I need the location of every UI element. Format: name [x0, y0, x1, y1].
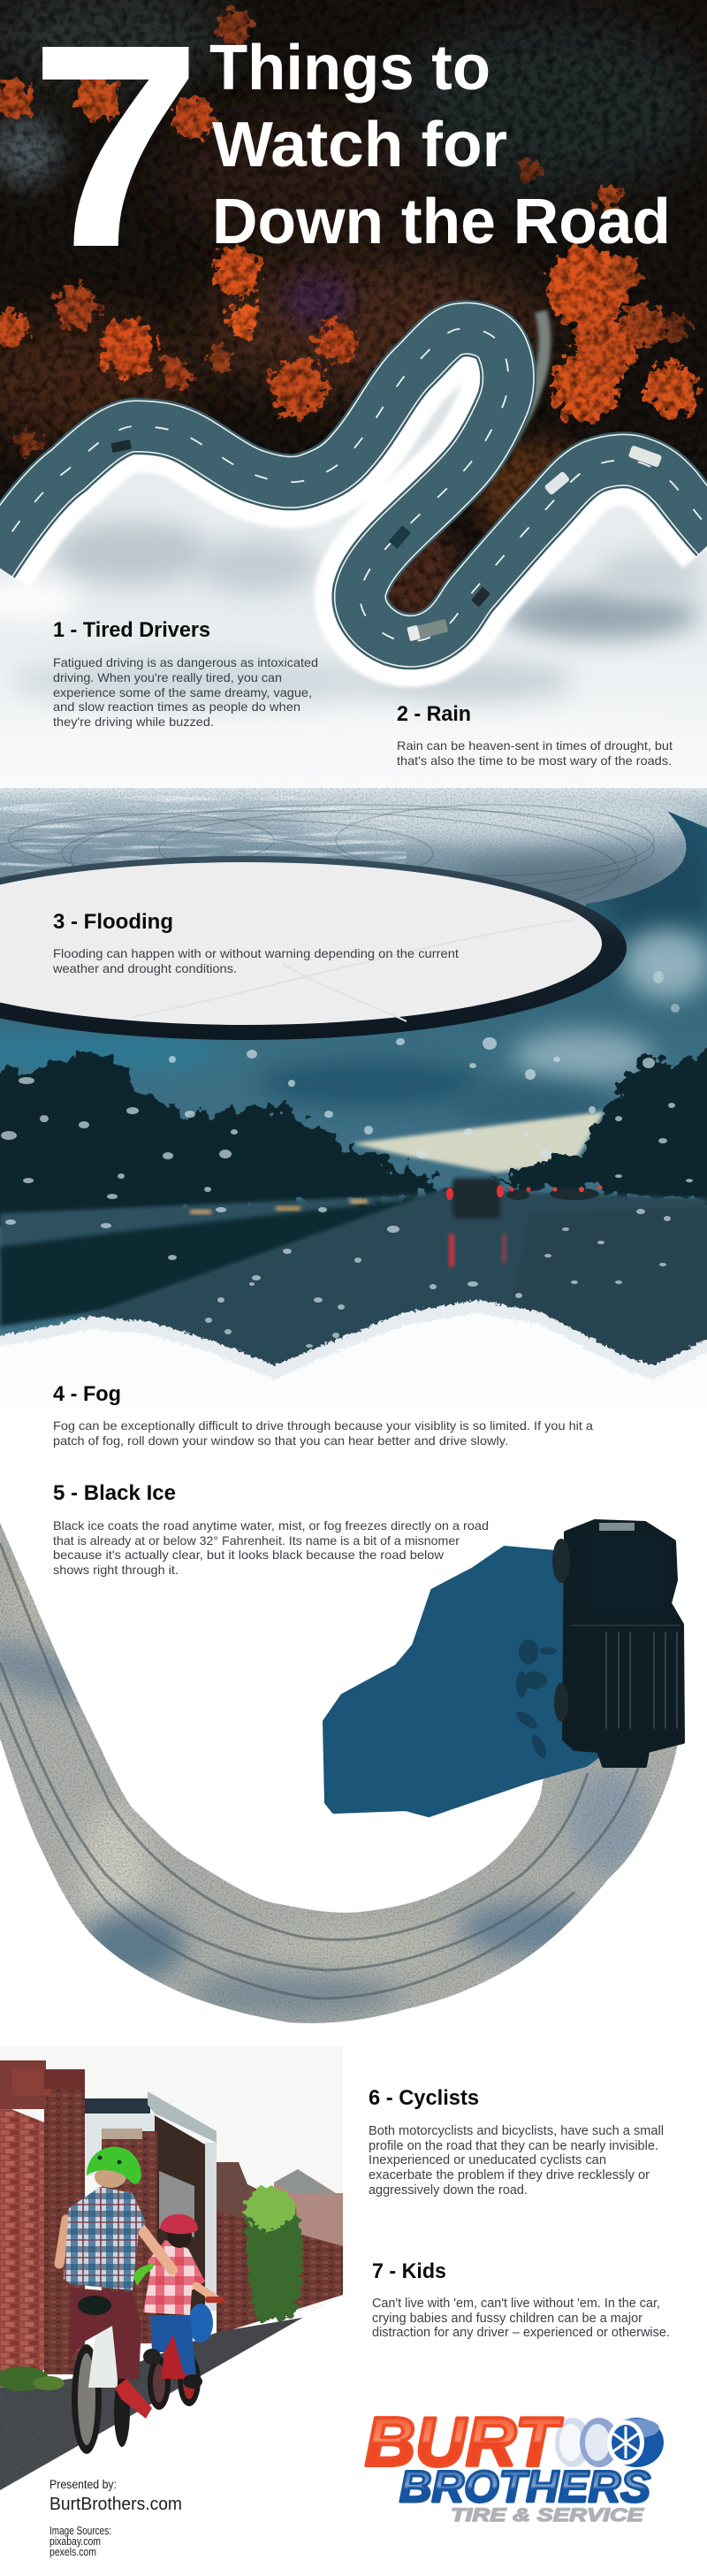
text block: 6 - Cyclists: exacerbate the problem if they drive recklessly or: [369, 2168, 650, 2182]
panel: icy snow-covered road curve: [0, 1517, 707, 2038]
trees: orange foliage clusters: [0, 9, 698, 453]
logo: Burt Brothers Tire and Service: [365, 2403, 664, 2526]
panel: kids cycling photo: [0, 2046, 343, 2503]
text block: 1 - Tired Drivers: they're driving while buzzed.: [53, 715, 214, 729]
text block: presented by and image sources: BurtBrothers.com: [49, 2495, 182, 2514]
text block: presented by and image sources: Presented by:: [49, 2477, 117, 2491]
text block: 3 - Flooding: weather and drought conditions.: [52, 961, 237, 975]
text block: 4 - Fog: patch of fog, roll down your window so that you can hear better and drive slowly.: [53, 1433, 508, 1448]
far brick wall: [217, 2211, 343, 2335]
title: heading text: Watch for: [212, 110, 507, 180]
footprints in the shadow: [513, 1640, 557, 1760]
dark tree lines: [0, 1029, 707, 1229]
text block: 2 - Rain: [397, 702, 673, 768]
text block: 1 - Tired Drivers: experience some of the same dreamy, vague,: [53, 685, 312, 699]
text block: 1 - Tired Drivers: [53, 618, 318, 729]
text block: 7 - Kids: 7 - Kids: [372, 2259, 446, 2283]
road: winding mountain road with white lines: [0, 328, 707, 641]
far houses: [217, 2162, 343, 2246]
text block: 6 - Cyclists: [369, 2086, 664, 2198]
snow edge over the rain photo: [0, 1300, 707, 1437]
road surface: [0, 1189, 707, 1380]
text block: 5 - Black Ice: shows right through it.: [53, 1563, 179, 1577]
storm clouds: [0, 822, 707, 1128]
text block: 1 - Tired Drivers: 1 - Tired Drivers: [53, 618, 210, 642]
garage building: [80, 2091, 217, 2317]
text block: 4 - Fog: 4 - Fog: [53, 1382, 121, 1406]
middle brick pillars: [102, 2131, 157, 2343]
near brick wall and pillars: [0, 2105, 44, 2388]
logo: Burt Brothers Tire and Service: BURT: [365, 2403, 563, 2480]
tyre track arcs: [0, 804, 654, 901]
text block: 5 - Black Ice: because it's actually clear, but it looks black because the road below: [53, 1548, 445, 1562]
text block: 6 - Cyclists: 6 - Cyclists: [369, 2086, 479, 2110]
icon: older child on bike with green helmet: [59, 2147, 172, 2454]
text block: 5 - Black Ice: Black ice coats the road anytime water, mist, or fog freezes directly on a road: [53, 1518, 489, 1533]
text block: presented by and image sources: Image Sources:: [49, 2525, 111, 2537]
text block: 7 - Kids: Can't live with 'em, can't live without 'em. In the car,: [372, 2297, 660, 2311]
text block: 6 - Cyclists: aggressively down the road.: [369, 2183, 528, 2198]
text block: 1 - Tired Drivers: and slow reaction times as people do when: [53, 699, 300, 714]
gravel shoulder of the hairpin: [496, 311, 544, 462]
logo: Burt Brothers Tire and Service: BROTHERS: [399, 2462, 650, 2511]
text block: presented by and image sources: pexels.com: [49, 2546, 96, 2558]
logo: Burt Brothers Tire and Service: TIRE & SERVICE: [451, 2505, 644, 2526]
text block: presented by and image sources: [49, 2477, 182, 2558]
text block: 6 - Cyclists: Both motorcyclists and bicyclists, have such a small: [369, 2124, 664, 2138]
icon: dark pickup truck from above: [552, 1521, 683, 1766]
text block: 3 - Flooding: Flooding can happen with or without warning depending on the current: [53, 946, 459, 960]
title: heading text: Things to: [209, 33, 490, 103]
truck bed ribs: [606, 1632, 677, 1729]
car and brake lights: [190, 1178, 603, 1267]
text block: 5 - Black Ice: 5 - Black Ice: [53, 1481, 176, 1505]
panel: autumn forest aerial photo: [0, 0, 707, 672]
icon: younger child on red bike: [143, 2214, 224, 2410]
road surface: [0, 2295, 343, 2503]
text block: 3 - Flooding: [52, 910, 459, 975]
tyre tracks in the snow: [0, 1543, 641, 1999]
title: heading text: [209, 33, 671, 257]
cars on the road: [110, 440, 662, 641]
text block: 2 - Rain: Rain can be heaven-sent in times of drought, but: [397, 738, 673, 753]
icon: vehicle shadow: [325, 1543, 610, 1815]
text block: 2 - Rain: 2 - Rain: [397, 702, 471, 726]
text block: 7 - Kids: crying babies and fussy children can be a major: [372, 2312, 642, 2326]
hedge: [245, 2187, 302, 2320]
text block: 1 - Tired Drivers: driving. When you're really tired, you can: [53, 670, 282, 684]
panel: tyre-marked ice surface: [0, 788, 707, 907]
raindrops on glass: [1, 842, 693, 1359]
horizon band: [352, 1112, 604, 1173]
text block: 5 - Black Ice: [53, 1481, 489, 1577]
text block: 1 - Tired Drivers: Fatigued driving is as dangerous as intoxicated: [53, 655, 318, 669]
text block: 4 - Fog: [53, 1382, 593, 1448]
panel: rainy windshield photo: [0, 811, 707, 1380]
text block: 6 - Cyclists: profile on the road that they can be nearly invisible.: [369, 2139, 658, 2153]
title: heading text: Down the Road: [212, 187, 671, 257]
text block: 7 - Kids: distraction for any driver – experienced or otherwise.: [372, 2326, 670, 2340]
text block: 2 - Rain: that's also the time to be most wary of the roads.: [397, 753, 672, 768]
icon: tyres in logo: [555, 2418, 664, 2467]
text block: 7 - Kids: [372, 2259, 670, 2340]
text block: 6 - Cyclists: Inexperienced or uneducated cyclists can: [369, 2153, 606, 2167]
panel: flooding tyre-ring oval: [0, 856, 627, 1040]
weeds: [0, 2366, 49, 2391]
text block: 3 - Flooding: 3 - Flooding: [53, 910, 173, 934]
panel: cloudy sky below the road: [0, 356, 707, 773]
text block: 5 - Black Ice: that is already at or below 32° Fahrenheit. Its name is a bit of a misnomer: [53, 1533, 460, 1548]
text block: 4 - Fog: Fog can be exceptionally difficult to drive through because your visiblity is so limited. If you hit a: [53, 1418, 593, 1433]
text block: presented by and image sources: pixabay.com: [49, 2535, 101, 2548]
